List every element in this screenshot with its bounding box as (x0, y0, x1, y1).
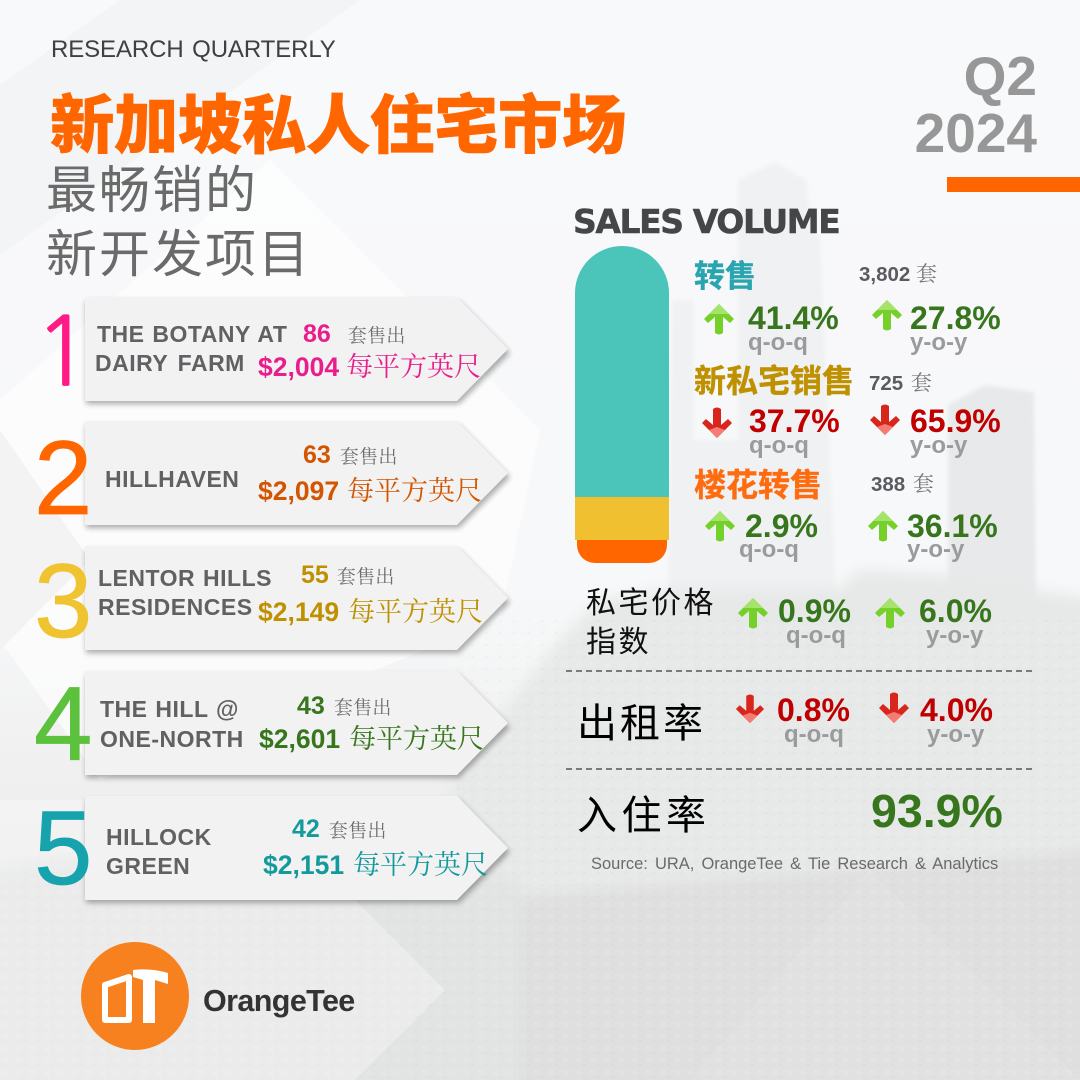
occupancy value: 93.9% (871, 785, 1003, 837)
icon: up arrow y-o-y (874, 597, 906, 629)
bottom-right facet (690, 870, 1080, 1080)
price: $2,149 每平方英尺 (258, 590, 483, 629)
project name: THE BOTANY AT (97, 321, 287, 347)
quarter label: 2024 (915, 102, 1037, 164)
project name: LENTOR HILLS (98, 565, 272, 591)
band shape (82, 546, 512, 656)
price: $2,097 每平方英尺 (258, 469, 482, 508)
label y-o-y: y-o-y (910, 432, 967, 459)
price: $2,151 每平方英尺 (263, 843, 488, 882)
logo circle (81, 942, 189, 1050)
icon: up arrow q-o-q (704, 304, 734, 334)
rank 3 (34, 543, 512, 660)
project name: THE HILL @ (100, 696, 239, 722)
percent y-o-y: 36.1% (907, 508, 998, 544)
icon: down arrow y-o-y (870, 404, 900, 435)
subtitle: 新开发项目 (46, 213, 311, 287)
new sales stats (694, 356, 1001, 459)
price index label (586, 581, 716, 659)
label q-o-q: q-o-q (749, 432, 809, 459)
low city (0, 570, 1080, 1080)
price index stats (586, 578, 992, 661)
project name: HILLHAVEN (105, 466, 239, 492)
project name (100, 696, 244, 752)
label q-o-q: q-o-q (739, 536, 799, 563)
band shape (82, 796, 512, 906)
resale label: 转售 (694, 251, 756, 296)
band shape (82, 297, 512, 408)
label q-o-q: q-o-q (748, 329, 808, 356)
resale stats (694, 251, 1001, 356)
label y-o-y: y-o-y (907, 536, 964, 563)
teal segment: resale (575, 246, 669, 497)
icon: up arrow q-o-q (737, 597, 769, 629)
wordmark: OrangeTee (203, 984, 355, 1018)
sub-sale stats (694, 460, 998, 563)
rank 5 (34, 790, 512, 907)
units sold: 86 套售出 (303, 320, 406, 348)
project name: RESIDENCES (98, 594, 253, 620)
rank number: 3 (34, 543, 92, 660)
units sold: 63 套售出 (303, 441, 398, 469)
stacked bar (575, 246, 669, 563)
label q-o-q: q-o-q (786, 622, 846, 649)
dashed dividers (566, 668, 1036, 772)
price: $2,601 每平方英尺 (259, 717, 484, 756)
percent y-o-y: 27.8% (910, 300, 1001, 336)
orange accent bar (947, 177, 1080, 192)
price index label: 私宅价格 (586, 578, 716, 622)
percent q-o-q: 0.8% (777, 692, 850, 728)
sales volume heading: SALES VOLUME (573, 202, 839, 241)
bottom-left chevron (0, 800, 445, 1080)
percent q-o-q: 41.4% (748, 300, 839, 336)
sub-sale label: 楼花转售 (694, 460, 822, 506)
quarter label (915, 45, 1037, 164)
label q-o-q: q-o-q (784, 721, 844, 748)
header: research quarterly: RESEARCH QUARTERLY (51, 36, 336, 63)
icon: down arrow q-o-q (702, 408, 732, 438)
title: 新加坡私人住宅市场 (50, 73, 626, 167)
project name (98, 565, 272, 620)
rank 4 (34, 666, 512, 783)
source: Source: URA, OrangeTee & Tie Research & Analytics (591, 855, 998, 873)
units sold: 42 套售出 (292, 815, 387, 843)
percent q-o-q: 37.7% (749, 403, 840, 439)
occupancy label: 入住率 (577, 783, 710, 841)
icon: down arrow q-o-q (735, 694, 765, 724)
price index label: 指数 (586, 617, 651, 661)
percent y-o-y: 4.0% (920, 692, 993, 728)
rank number: 2 (34, 420, 92, 537)
price: $2,004 每平方英尺 (258, 345, 481, 384)
band shape (82, 671, 512, 782)
project name (106, 824, 212, 879)
percent q-o-q: 0.9% (778, 593, 851, 629)
sub-sale units: 388 套 (871, 468, 934, 498)
resale units: 3,802 套 (859, 258, 937, 288)
orange segment: sub-sale (577, 540, 667, 563)
icon: down arrow y-o-y (878, 692, 910, 724)
rental label: 出租率 (577, 691, 706, 749)
quarter label: Q2 (964, 45, 1037, 107)
rank number: 1 (34, 304, 92, 399)
yellow segment: new sales (575, 497, 669, 540)
icon: up arrow q-o-q (705, 511, 735, 542)
rank 2 (34, 420, 512, 537)
logo (81, 942, 361, 1050)
percent y-o-y: 65.9% (910, 403, 1001, 439)
band shape (82, 421, 512, 532)
icon: up arrow y-o-y (872, 300, 902, 330)
units sold: 55 套售出 (301, 561, 395, 589)
icon: up arrow y-o-y (868, 511, 898, 542)
far tower (668, 163, 1036, 600)
right tower (948, 385, 1036, 600)
new sales units: 725 套 (869, 367, 932, 397)
project name: DAIRY FARM (95, 350, 245, 376)
label y-o-y: y-o-y (926, 622, 983, 649)
subtitle: 最畅销的 (46, 149, 258, 223)
rank 1 (34, 297, 512, 408)
new sales label: 新私宅销售 (694, 356, 854, 402)
label y-o-y: y-o-y (910, 329, 967, 356)
rental stats (570, 685, 1010, 755)
project name: ONE-NORTH (100, 726, 244, 752)
subtitle (46, 149, 311, 287)
rank number: 5 (34, 790, 92, 907)
units sold: 43 套售出 (297, 692, 392, 720)
project name: GREEN (106, 853, 190, 879)
rank number: 4 (34, 666, 92, 783)
top-left facets (0, 0, 360, 255)
project name (95, 321, 287, 376)
percent q-o-q: 2.9% (745, 508, 818, 544)
percent y-o-y: 6.0% (919, 593, 992, 629)
label y-o-y: y-o-y (927, 721, 984, 748)
project name: HILLOCK (106, 824, 212, 850)
